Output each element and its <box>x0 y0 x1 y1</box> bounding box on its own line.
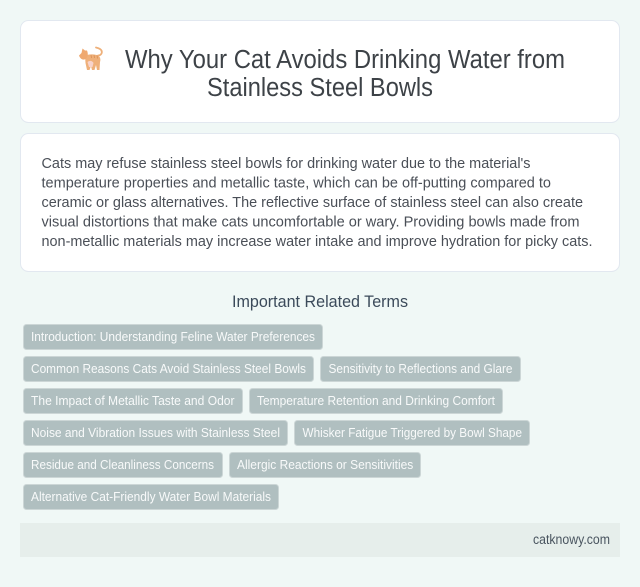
title: Why Your Cat Avoids Drinking Water from <box>125 46 565 74</box>
tag: Introduction: Understanding Feline Water Preferences <box>31 329 315 344</box>
panel: title card <box>20 20 620 122</box>
tag list <box>24 324 530 510</box>
tag: Common Reasons Cats Avoid Stainless Steel Bowls <box>31 361 306 376</box>
tag <box>320 356 520 382</box>
text block: description <box>42 155 592 250</box>
tag <box>24 324 322 350</box>
tag: Residue and Cleanliness Concerns <box>31 457 214 472</box>
tag <box>24 420 288 446</box>
tag <box>294 420 530 446</box>
text block: description: temperature properties and metallic taste, which can be off-putting compared to <box>42 174 551 192</box>
tag <box>24 356 314 382</box>
panel: description <box>20 134 620 272</box>
title <box>125 46 565 102</box>
tag: Temperature Retention and Drinking Comfort <box>257 393 495 408</box>
text block: description: Cats may refuse stainless steel bowls for drinking water due to the material's <box>42 155 530 172</box>
text block: description: ceramic or glass alternatives. The reflective surface of stainless steel can also create <box>42 194 583 211</box>
tag: Noise and Vibration Issues with Stainless Steel <box>31 425 280 440</box>
footer <box>20 523 620 557</box>
tag: Allergic Reactions or Sensitivities <box>237 457 414 472</box>
tag: Whisker Fatigue Triggered by Bowl Shape <box>302 425 522 440</box>
tag: Alternative Cat-Friendly Water Bowl Materials <box>31 489 271 504</box>
tag: The Impact of Metallic Taste and Odor <box>31 393 235 408</box>
tag <box>24 388 242 414</box>
heading: related terms: Important Related Terms <box>232 293 408 311</box>
footer: catknowy.com <box>533 532 610 547</box>
tag <box>250 388 502 414</box>
title: Stainless Steel Bowls <box>207 74 433 102</box>
text block: description: non-metallic materials may increase water intake and improve hydration for picky cats. <box>42 233 592 250</box>
tag <box>24 484 278 510</box>
tag <box>24 452 222 478</box>
icon: orange cat <box>79 48 102 70</box>
tag: Sensitivity to Reflections and Glare <box>328 361 512 376</box>
text block: description: visual distortions that make cats uncomfortable or wary. Providing bowls made from <box>42 214 580 230</box>
tag <box>230 452 420 478</box>
